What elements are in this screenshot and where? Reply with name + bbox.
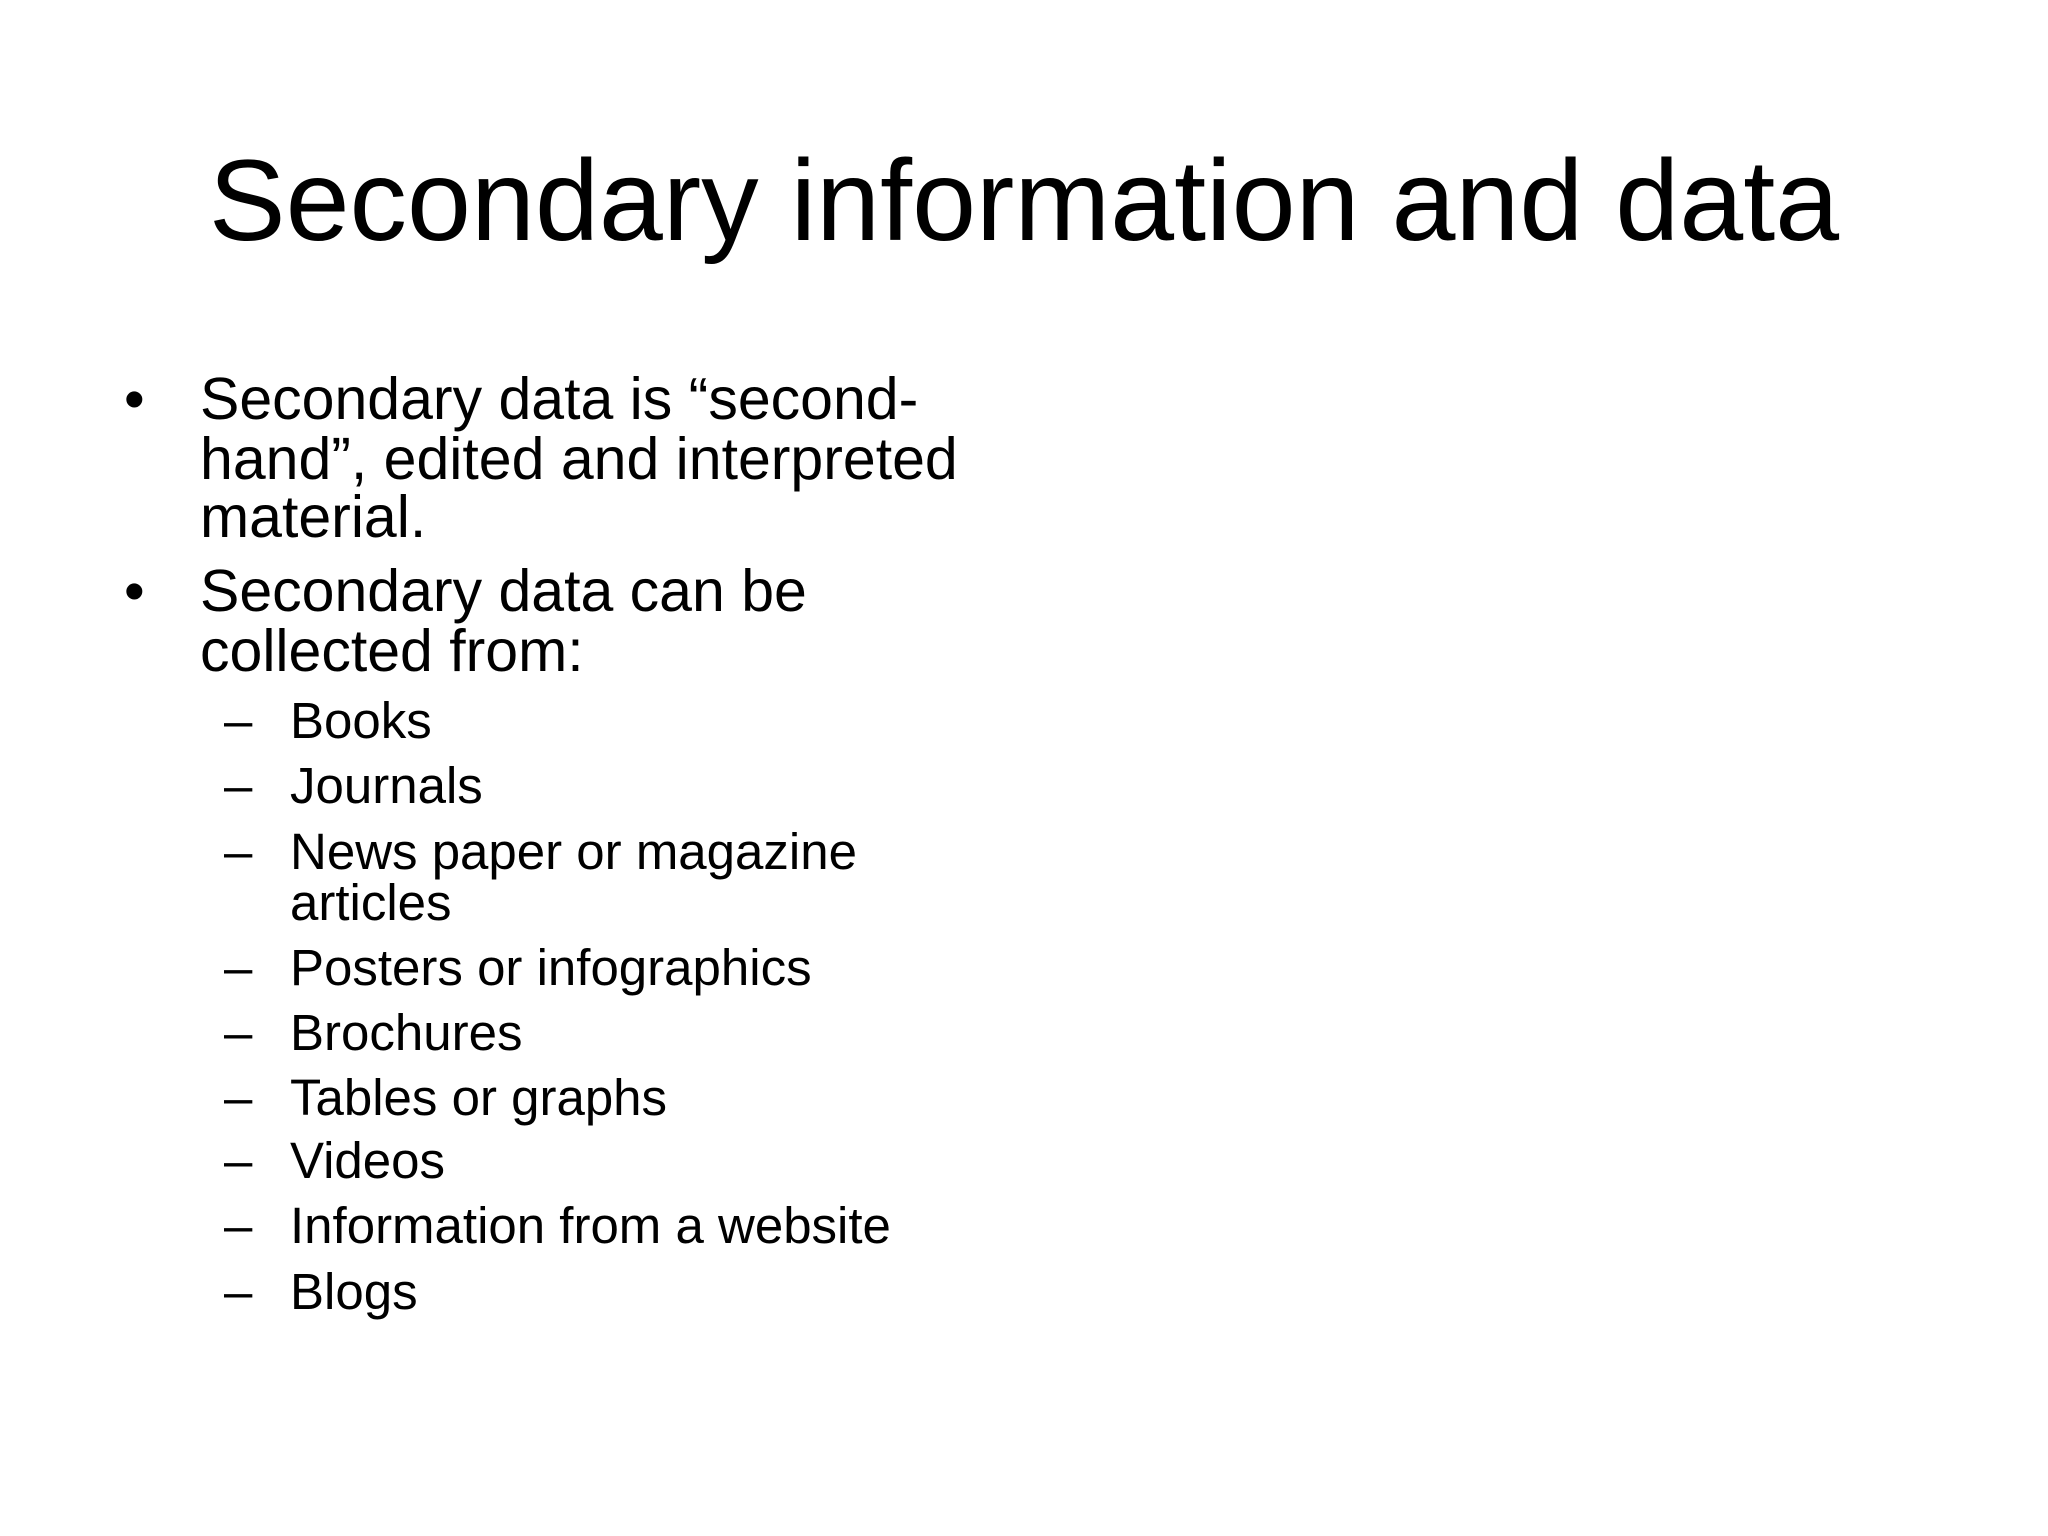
sub list: sources: – bbox=[224, 939, 252, 996]
sub list: sources: – bbox=[224, 757, 252, 814]
sub list: sources: Tables or graphs bbox=[290, 1069, 667, 1126]
text: bullet 1 bbox=[200, 366, 958, 550]
sub list: sources: Brochures bbox=[290, 1004, 522, 1061]
text: bullet 1: Secondary data is “second- bbox=[200, 366, 918, 432]
sub list: sources: articles bbox=[290, 874, 452, 931]
text: bullet 2 bbox=[200, 558, 807, 684]
sub list: sources: News paper or magazine bbox=[290, 823, 857, 880]
bullet list: main points bbox=[124, 366, 958, 684]
text: bullet 2: Secondary data can be bbox=[200, 558, 807, 624]
sub list: sources: Posters or infographics bbox=[290, 939, 812, 996]
text: bullet 1: hand”, edited and interpreted bbox=[200, 426, 958, 492]
sub list: sources: – bbox=[224, 1197, 252, 1254]
sub list: sources: – bbox=[224, 1132, 252, 1189]
sub list: sources: – bbox=[224, 1004, 252, 1061]
sub list: sources: – bbox=[224, 823, 252, 880]
text: bullet 2: collected from: bbox=[200, 618, 584, 684]
bullet 1: • bbox=[124, 366, 145, 432]
title: Secondary information and data bbox=[209, 137, 1839, 265]
text: bullet 1: material. bbox=[200, 484, 426, 550]
sub list: sources: Information from a website bbox=[290, 1197, 891, 1254]
sub list: sources: Journals bbox=[290, 757, 483, 814]
sub list: sources: – bbox=[224, 1069, 252, 1126]
bullet 2: • bbox=[124, 558, 145, 624]
sub list: sources: – bbox=[224, 1263, 252, 1320]
sub list: sources: Books bbox=[290, 692, 432, 749]
sub list: sources bbox=[224, 692, 891, 1320]
sub list: sources: Blogs bbox=[290, 1263, 418, 1320]
sub list: sources: – bbox=[224, 692, 252, 749]
sub list: sources: Videos bbox=[290, 1132, 445, 1189]
